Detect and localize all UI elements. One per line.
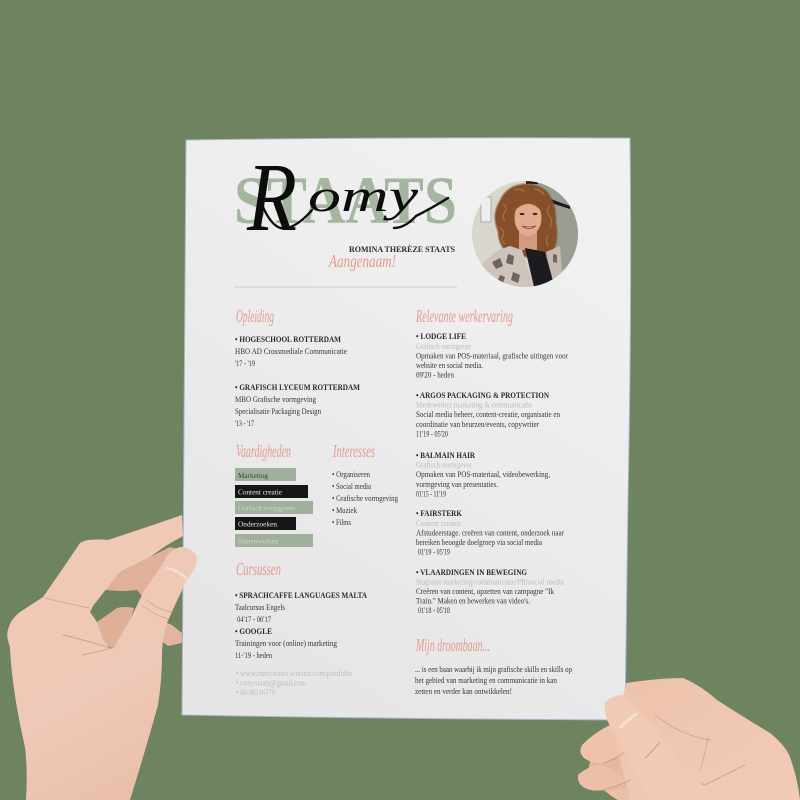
skill: Marketing: Marketing (238, 471, 268, 480)
palm and index finger (7, 515, 183, 800)
interests list: • Films (332, 518, 351, 527)
job: Fairsterk (416, 509, 564, 556)
interests list: • Grafische vormgeving (332, 494, 398, 503)
education entry 2 (235, 383, 360, 428)
heading: Cursussen: Cursussen (236, 559, 281, 579)
job: Balmain Hair: 01'15 - 11'19 (416, 490, 446, 498)
left hand (7, 515, 197, 800)
interests list: • Organiseren (332, 470, 370, 479)
greeting: Aangenaam! (328, 251, 396, 271)
job: Balmain Hair: vormgeving van presentaties. (416, 480, 498, 489)
interests list (332, 470, 398, 527)
contact details (236, 669, 352, 697)
job: Argos Packaging: • ARGOS PACKAGING & PROTECTION (416, 391, 549, 400)
title: signature Romy: R (246, 144, 297, 252)
education entry 2: MBO Grafische vormgeving (235, 395, 316, 404)
heading: Interesses: Interesses (332, 441, 375, 461)
text: left column and right column (235, 306, 572, 697)
job: Lodge Life: • LODGE LIFE (416, 332, 466, 341)
thumb nail (167, 568, 186, 578)
job: Vlaardingen in Beweging: Creëren van content, opzetten van campagne "Ik (416, 587, 554, 596)
education entry 1: '17 - '19 (235, 359, 255, 368)
job: Lodge Life: Opmaken van POS-materiaal, grafische uitingen voor (416, 352, 568, 361)
interests list: • Social media (332, 482, 371, 491)
job: Balmain Hair: Grafisch vormgever (416, 460, 472, 470)
job: Argos Packaging (416, 391, 560, 438)
job: Argos Packaging: 11'19 - 05'20 (416, 430, 448, 438)
title: surname STAATS: STAATS (234, 162, 457, 238)
finger creases (603, 715, 745, 790)
skill: Samenwerken: Samenwerken (238, 536, 278, 546)
education entry 2: Specialisatie Packaging Design (235, 407, 321, 416)
ring finger (97, 607, 134, 648)
course entries: Taalcursus Engels (235, 603, 285, 612)
course entries: • GOOGLE (235, 627, 272, 636)
education entry 2: '13 - '17 (235, 419, 254, 428)
portrait photo (470, 180, 580, 292)
divider (234, 286, 457, 288)
dream job text (415, 665, 572, 696)
job: Argos Packaging: coordinatie van beurzen/events, copywriter (416, 420, 539, 429)
heading: Vaardigheden: Vaardigheden (236, 441, 291, 461)
education entry 1: HBO AD Crossmediale Communicatie (235, 347, 347, 356)
heading: Mijn droombaan: Mijn droombaan... (415, 635, 490, 655)
job: Fairsterk: Content creator (416, 519, 461, 528)
dream job text: zetten en verder kan ontwikkelen! (415, 687, 512, 696)
job: Lodge Life (416, 332, 568, 380)
panel: paper sheet (182, 138, 631, 720)
skin between fingers (585, 728, 645, 800)
lower hand and wrist (7, 547, 197, 800)
dream job text: ... is een baan waarbij ik mijn grafische skills en skills op (415, 665, 572, 674)
full name: ROMINA THERÈZE STAATS (349, 244, 455, 254)
heading: Relevante werkervaring: Relevante werkervaring (415, 306, 513, 326)
pinky behind thumb (160, 622, 182, 646)
course entries (235, 591, 367, 660)
job: Lodge Life: 09'20 - heden (416, 370, 454, 380)
right hand (578, 678, 800, 800)
job: Vlaardingen in Beweging: 01'18 - 05'18 (418, 606, 450, 615)
heading: Opleiding: Opleiding (236, 306, 274, 326)
job: Lodge Life: website en social media. (416, 361, 483, 370)
skill: Onderzoeken: Onderzoeken (238, 520, 277, 528)
thumb nail (621, 714, 636, 727)
thumb (605, 695, 713, 800)
education entry 2: • GRAFISCH LYCEUM ROTTERDAM (235, 383, 360, 392)
skill: Grafisch vormgeven: Grafisch vormgeven (238, 504, 295, 512)
title: signature Romy: omy (308, 170, 419, 221)
contact details: • 06-36516779 (236, 688, 275, 697)
job: Vlaardingen in Beweging: Train." Maken en bewerken van video's. (416, 596, 530, 606)
skill: Content creatie: Content creatie (238, 488, 283, 496)
job: Argos Packaging: Social media beheer, content-creatie, organisatie en (416, 410, 560, 419)
course entries: Trainingen voor (online) marketing (235, 639, 337, 648)
job: Lodge Life: Grafisch vormgever (416, 342, 471, 351)
finger tips (580, 725, 625, 763)
course entries: 11-'19 - heden (235, 651, 272, 660)
job: Vlaardingen in Beweging: • VLAARDINGEN IN BEWEGING (416, 568, 528, 577)
job: Fairsterk: • FAIRSTERK (416, 509, 463, 518)
job: Fairsterk: bereiken beoogde doelgroep via social media (416, 538, 542, 547)
contact details: • romystaats@gmail.com (236, 678, 307, 688)
job: Argos Packaging: Medewerker marketing & communicatie (416, 400, 532, 410)
job: Balmain Hair: Opmaken van POS-materiaal, videobewerking, (416, 470, 550, 479)
middle finger (105, 547, 178, 597)
job: Vlaardingen in Beweging: Stagiaire marketing/communicatie/PR/social media (416, 578, 564, 586)
job: Balmain Hair: • BALMAIN HAIR (416, 451, 475, 460)
title: signature Romy (246, 144, 448, 252)
job: Fairsterk: 01'19 - 05'19 (418, 548, 450, 556)
dream job text: het gebied van marketing en communicatie in kan (415, 676, 557, 685)
skill bars (235, 468, 313, 547)
job: Vlaardingen in Beweging (416, 568, 564, 615)
interests list: • Muziek (332, 506, 357, 515)
course entries: 04'17 - 06'17 (237, 615, 271, 624)
palm and back of hand (615, 678, 800, 800)
hand creases (45, 598, 172, 655)
education entry 1: • HOGESCHOOL ROTTERDAM (235, 335, 341, 344)
job: Fairsterk: Afstudeerstage. creëren van content, onderzoek naar (416, 528, 564, 538)
course entries: • SPRACHCAFFE LANGUAGES MALTA (235, 591, 367, 600)
job: Balmain Hair (416, 451, 550, 498)
contact details: • www.romystaats.wixsite.com/portfolio (236, 669, 352, 678)
education entry 1 (235, 335, 347, 368)
